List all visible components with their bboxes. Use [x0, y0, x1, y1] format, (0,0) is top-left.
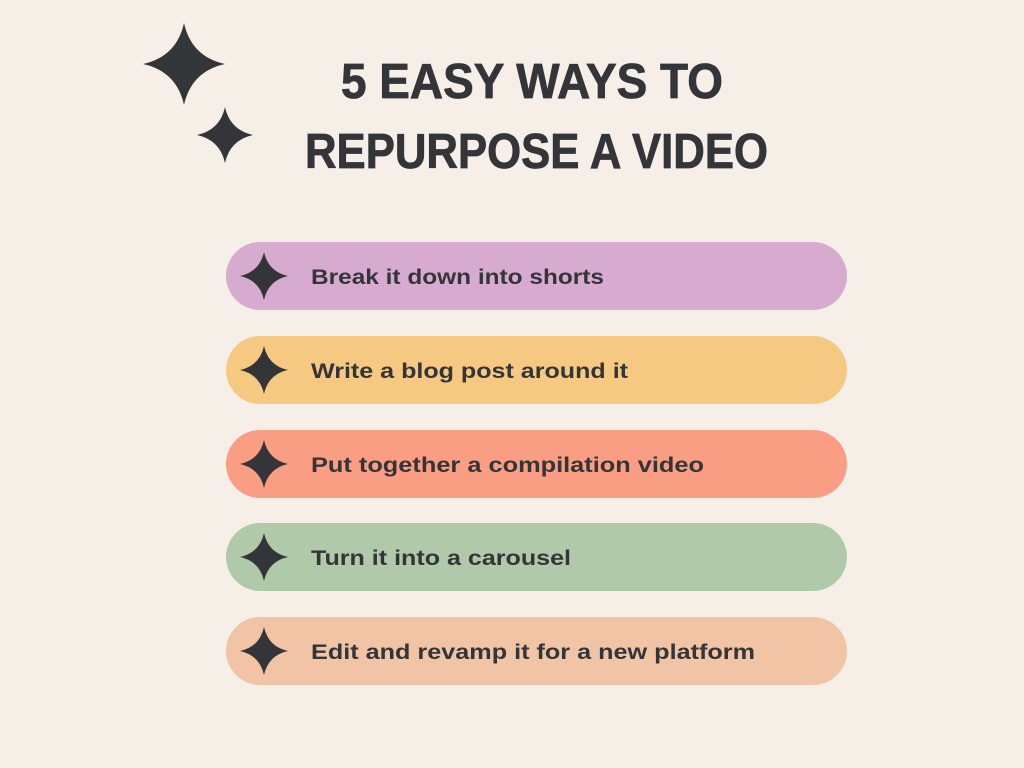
item 5: Edit and revamp it for a new platform: Edit and revamp it for a new platform	[311, 641, 755, 664]
item 1: Break it down into shorts	[226, 242, 847, 310]
item 1: Break it down into shorts: Break it down into shorts	[311, 266, 604, 289]
icon: small sparkle	[197, 107, 253, 163]
title: REPURPOSE A VIDEO	[305, 125, 768, 179]
item 5: Edit and revamp it for a new platform	[226, 617, 847, 685]
title	[305, 55, 768, 179]
item 3: Put together a compilation video: Put together a compilation video	[311, 454, 704, 477]
title: 5 EASY WAYS TO	[341, 55, 723, 109]
icon: large sparkle	[143, 23, 225, 105]
item 2: Write a blog post around it: Write a blog post around it	[311, 360, 628, 383]
item 3: Put together a compilation video	[226, 430, 847, 498]
item 4: Turn it into a carousel: Turn it into a carousel	[311, 547, 571, 570]
item 4: Turn it into a carousel	[226, 523, 847, 591]
item 2: Write a blog post around it	[226, 336, 847, 404]
